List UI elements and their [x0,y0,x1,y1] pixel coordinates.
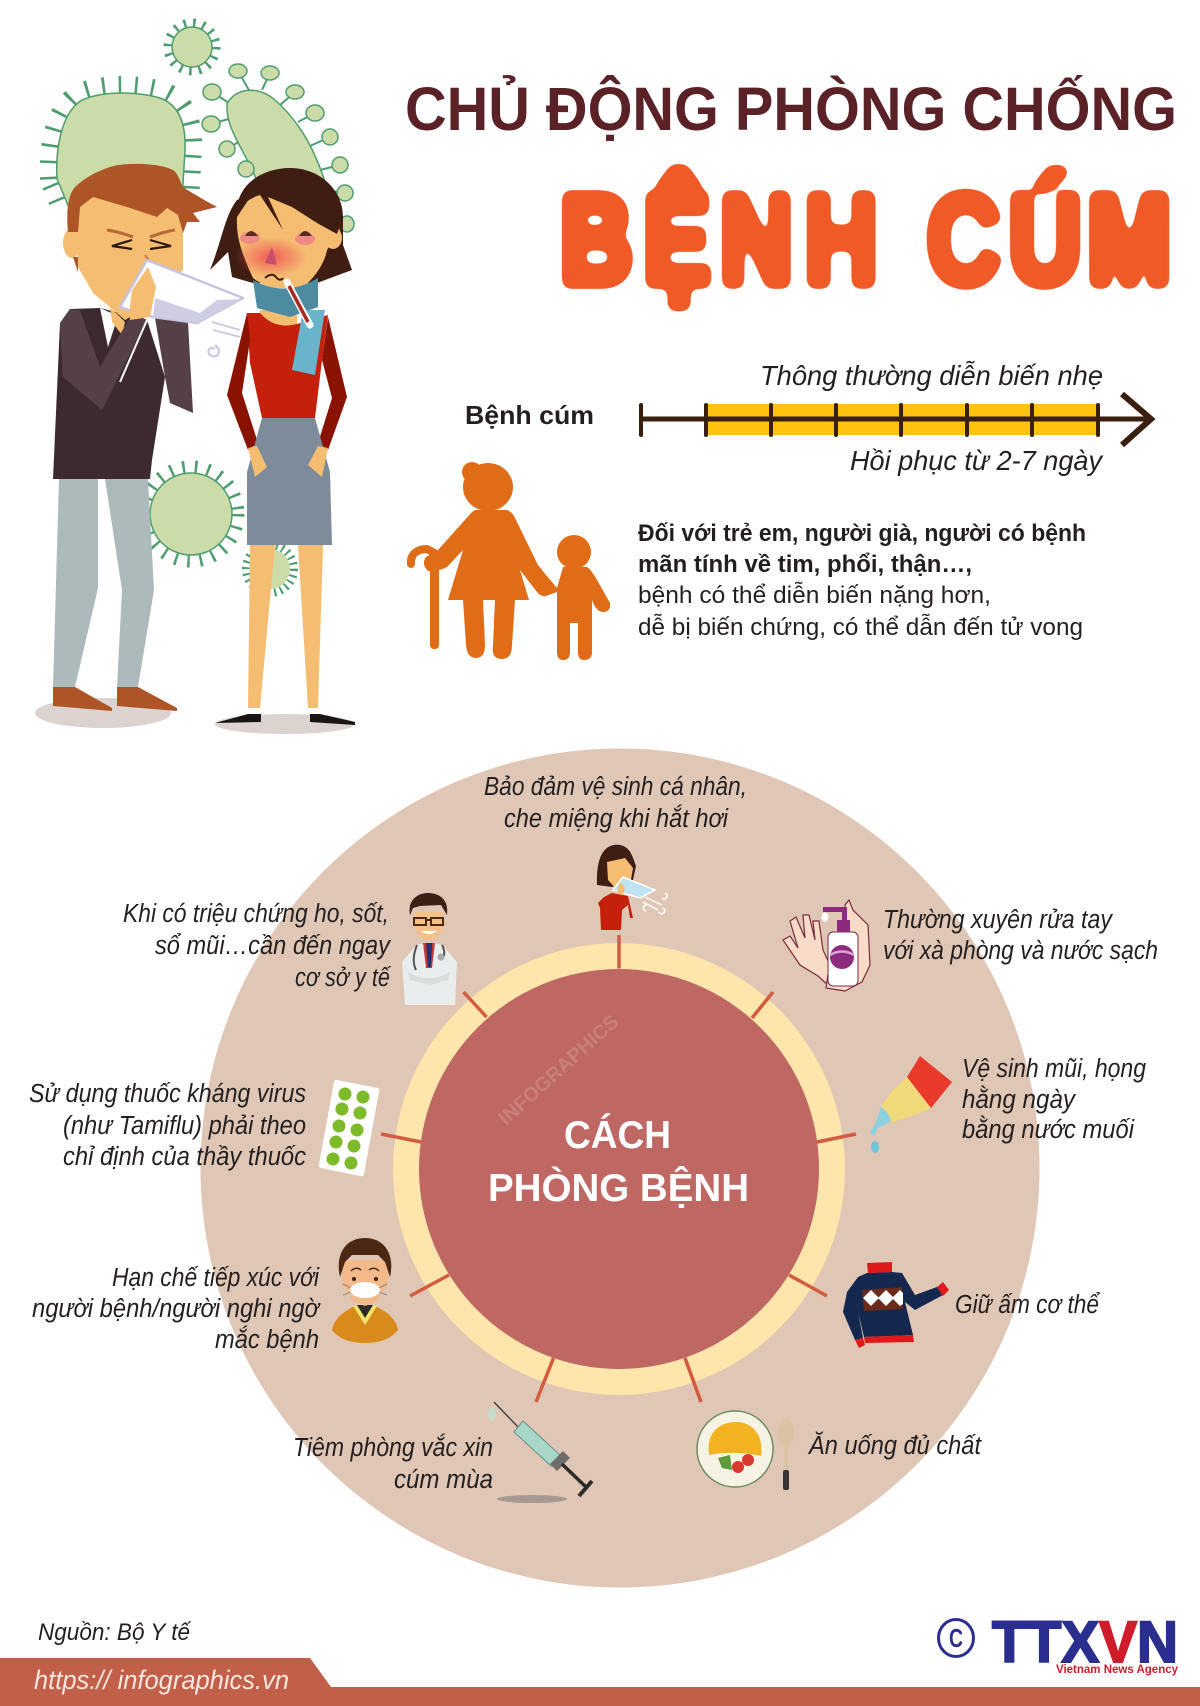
source: Nguồn: Bộ Y tế [38,1619,192,1646]
virus: bacillus right [202,64,354,232]
panel: prevention circle [200,748,1040,1588]
center label: CÁCH [564,1113,671,1157]
woman [210,168,355,734]
text: high-risk groups [638,520,1086,641]
icon: syringe [488,1402,592,1503]
virus: large left [57,93,185,210]
item: nose and throat text: bằng nước muối [962,1115,1135,1144]
item: limit contact text: Hạn chế tiếp xúc với [112,1264,320,1292]
item: personal hygiene text [484,773,747,833]
icon: plate and spoon [697,1411,794,1490]
item: limit contact text: mắc bệnh [215,1325,319,1354]
watermark: INFOGRAPHICS [495,1011,623,1130]
icon: elderly woman and child [411,462,610,660]
item: limit contact text: người bệnh/người nghi ngờ [32,1295,321,1323]
item: handwashing text: với xà phòng và nước sạch [883,937,1158,965]
illustration: viruses and sick couple [35,23,355,734]
text: high-risk groups: Đối với trẻ em, người già, người có bệnh [638,520,1086,547]
text: high-risk groups: bệnh có thể diễn biến nặng hơn, [638,582,991,609]
icon: saline bottle [870,1056,952,1153]
center label [488,1113,749,1210]
icon: doctor [402,893,457,1005]
item: warm clothes text: Giữ ấm cơ thể [955,1291,1101,1319]
item: nutrition text: Ăn uống đủ chất [807,1431,982,1460]
virus: small behind woman [247,546,293,592]
footer banner: https:// infographics.vn [34,1665,289,1695]
icon: pill pack [319,1080,379,1176]
item: antiviral text: chỉ định của thầy thuốc [63,1143,306,1171]
man [35,164,243,728]
item: handwashing text [883,906,1158,965]
item: antiviral text: (như Tamiflu) phải theo [63,1112,306,1140]
text: high-risk groups: dễ bị biến chứng, có thể dẫn đến tử vong [638,614,1083,641]
item: personal hygiene text: che miệng khi hắt hơi [504,804,729,833]
logo: TTXVN: TTXVN [992,1610,1178,1675]
item: antiviral text [29,1080,306,1171]
timeline chart [641,394,1151,445]
item: see a doctor text [123,900,392,992]
center label: PHÒNG BỆNH [488,1166,749,1210]
virus: lower middle [144,467,238,561]
item: nose and throat text: Vệ sinh mũi, họng [962,1055,1146,1083]
logo: TTXVN: Vietnam News Agency [1056,1662,1178,1676]
text: high-risk groups: mãn tính về tim, phổi, thận…, [638,551,972,578]
virus: small top [168,23,216,71]
icon: sneezing woman [597,845,667,930]
title: CHỦ ĐỘNG PHÒNG CHỐNG [405,75,1177,143]
item: limit contact text [32,1264,321,1354]
item: nose and throat text: hằng ngày [962,1085,1077,1114]
icon: sweater [843,1262,949,1348]
item: vaccination text: cúm mùa [394,1466,493,1494]
radial ticks [381,935,856,1402]
timeline label: Bệnh cúm [465,400,594,430]
item: handwashing text: Thường xuyên rửa tay [883,906,1114,934]
logo: TTXVN: C [949,1623,963,1653]
icon: person with mask [332,1238,398,1343]
item: nose and throat text [962,1055,1146,1144]
icon: soap and hands [783,900,870,991]
item: vaccination text: Tiêm phòng vắc xin [293,1433,493,1462]
item: see a doctor text: Khi có triệu chứng ho, sốt, [123,900,389,928]
item: see a doctor text: sổ mũi…cần đến ngay [155,932,392,960]
timeline caption top: Thông thường diễn biến nhẹ [760,360,1103,391]
headline: bệnh cúm: BỆNH CÚM [560,169,1171,311]
timeline caption bottom: Hồi phục từ 2-7 ngày [850,445,1104,476]
item: vaccination text [293,1433,493,1494]
item: see a doctor text: cơ sở y tế [295,964,392,992]
item: personal hygiene text: Bảo đảm vệ sinh cá nhân, [484,773,747,801]
footer banner [0,1658,1200,1706]
item: antiviral text: Sử dụng thuốc kháng virus [29,1080,306,1108]
